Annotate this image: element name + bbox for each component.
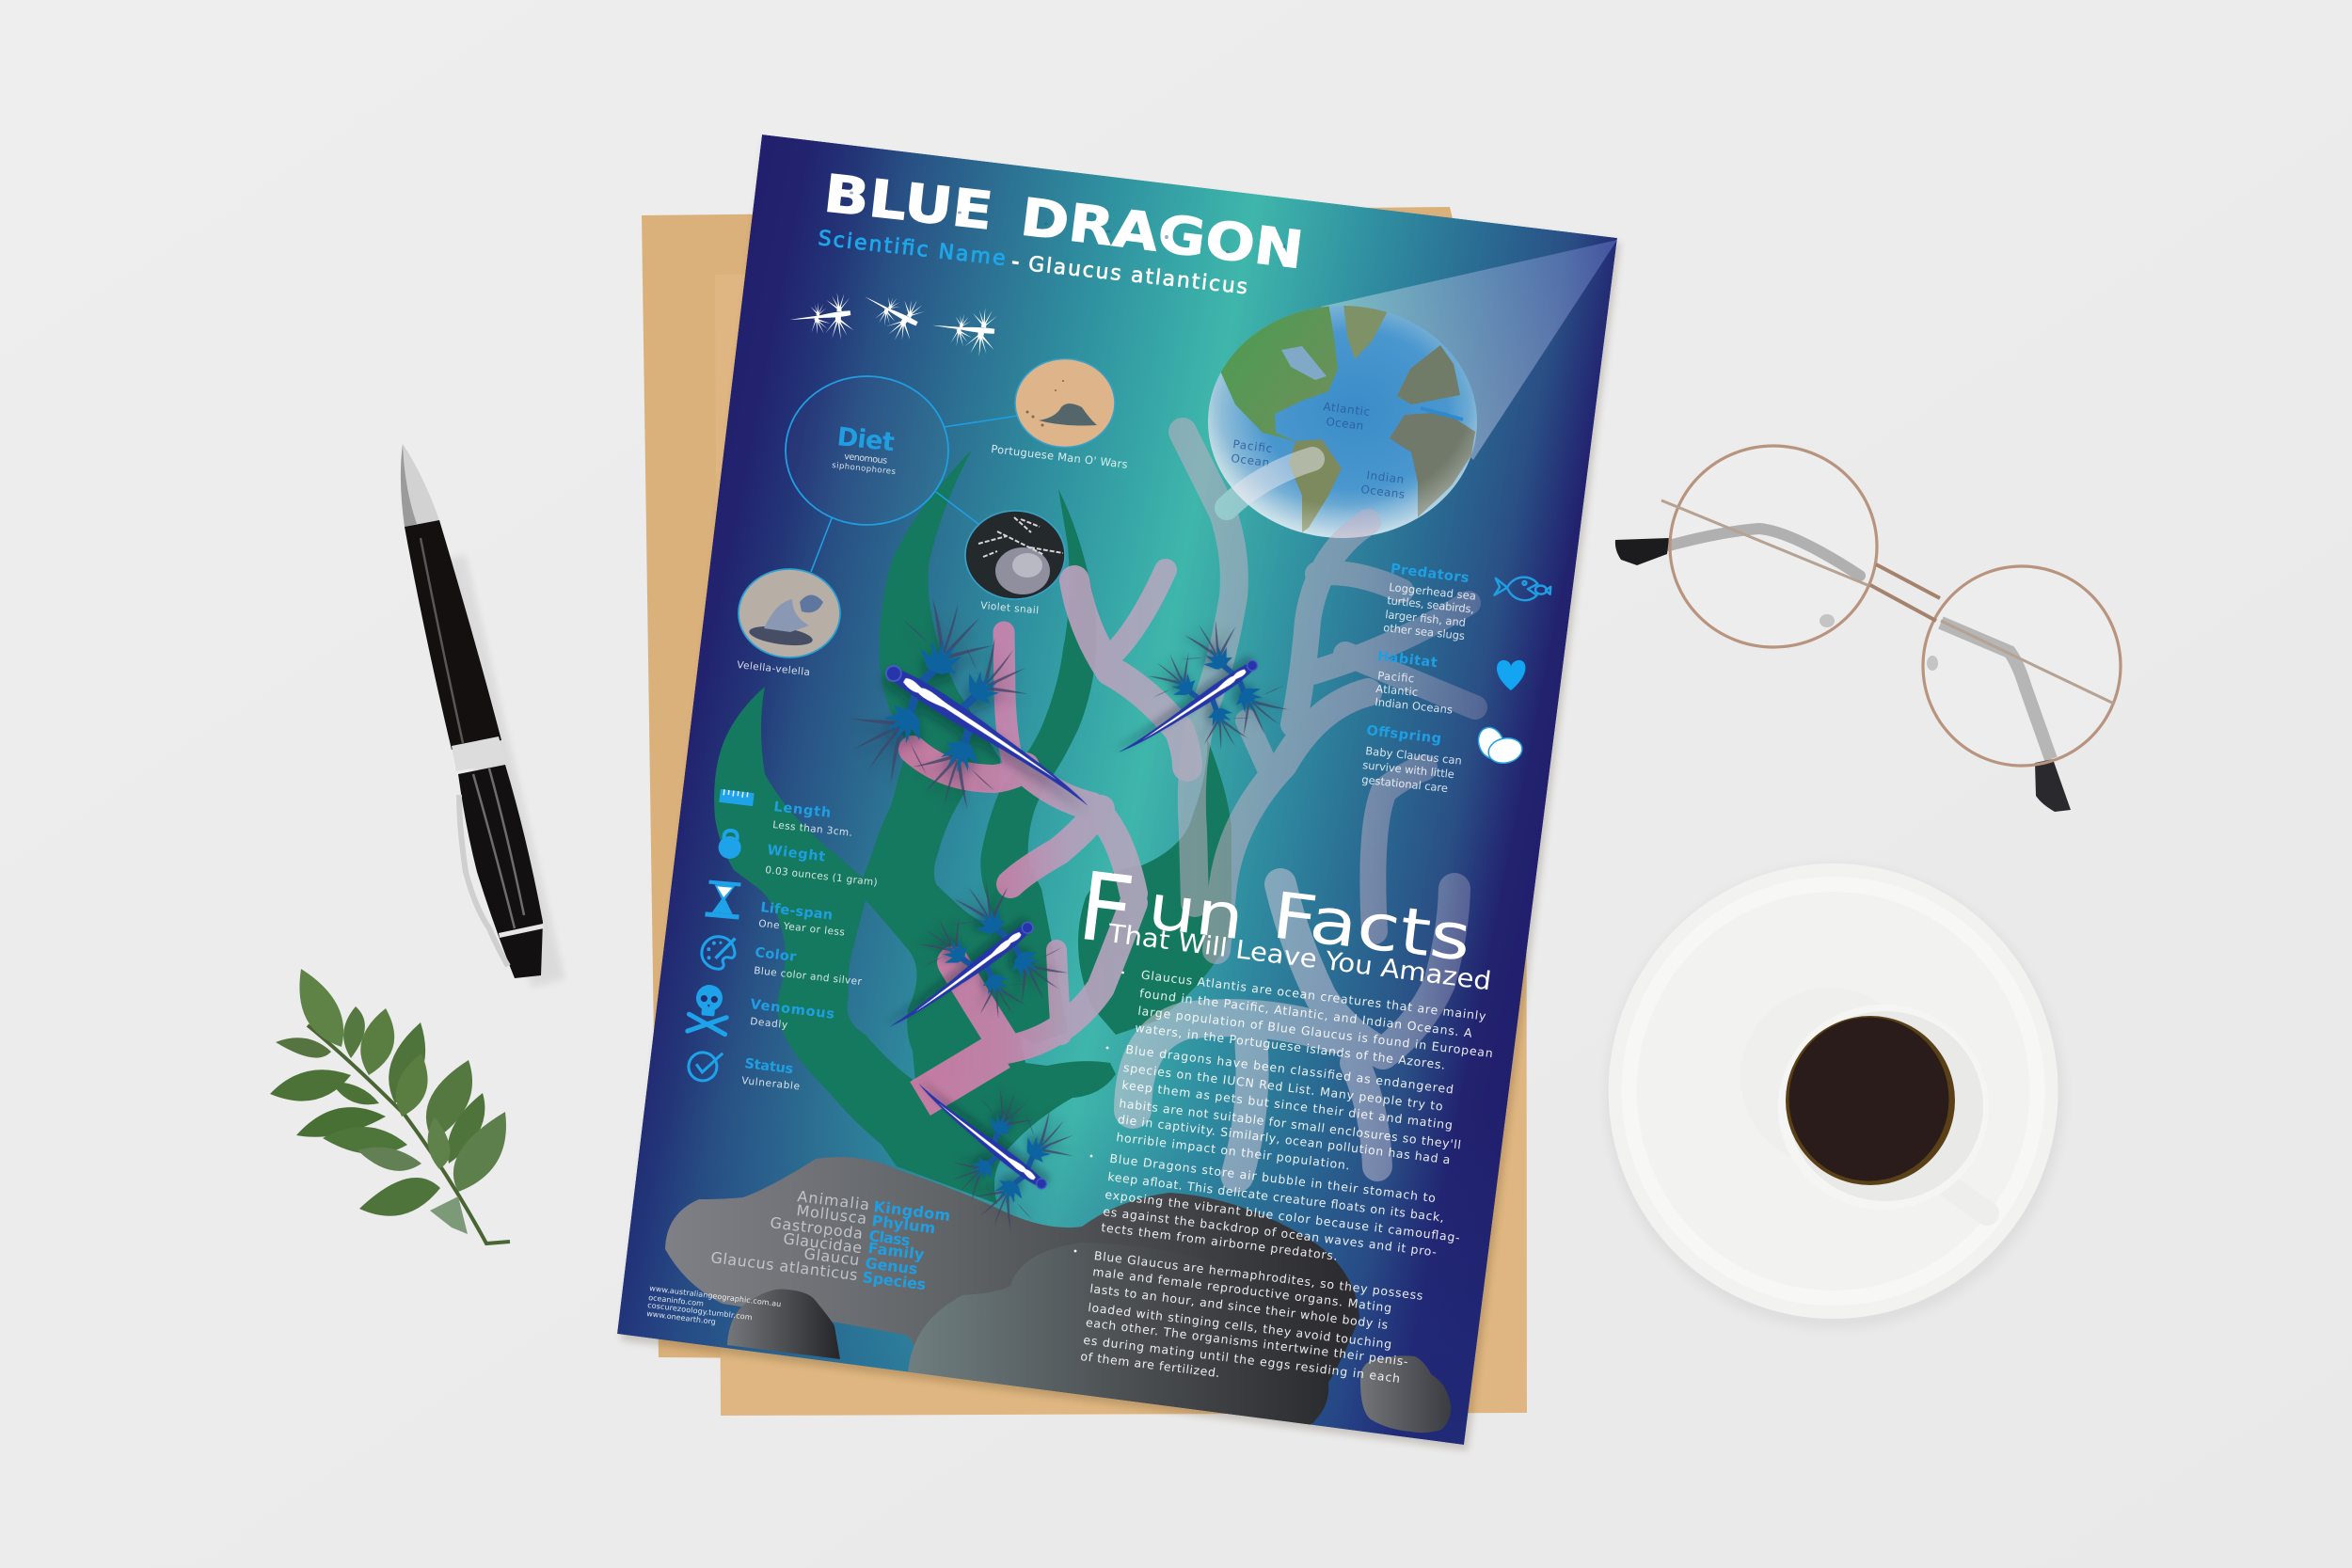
stat: venomous: Deadly (750, 1016, 788, 1031)
taxonomy: Kingdom (873, 1197, 951, 1225)
stat: color: Color (755, 945, 798, 965)
scientific name: Scientific Name (817, 227, 1007, 271)
fun fact 2 (1106, 1042, 1462, 1172)
fun fact 1: waters, in the Portuguese islands of the Azores. (1135, 1021, 1446, 1072)
diet circle (786, 376, 948, 525)
prey: Portuguese Man O' War: Portuguese Man O' Wars (991, 442, 1128, 471)
prey: Velella-velella (737, 569, 840, 678)
icon: hourglass (705, 880, 742, 919)
ocean labels: Ocean (1231, 451, 1270, 469)
fun fact 4: Blue Glaucus are hermaphrodites, so they possess (1093, 1248, 1423, 1303)
diet connector lines (811, 416, 1018, 572)
panel: predators: other sea slugs (1383, 621, 1466, 642)
big dragon 3 (890, 882, 1069, 1027)
panel: offspring: Baby Claucus can (1365, 744, 1463, 768)
poster shadow (621, 141, 1620, 1450)
fun fact 2: die in captivity. Similarly, ocean pollution has had a (1117, 1112, 1451, 1166)
fun fact 3: es against the backdrop of ocean waves and it pro- (1103, 1204, 1438, 1259)
ocean labels: Ocean (1326, 415, 1364, 433)
taxonomy: Species (862, 1268, 927, 1293)
icon: heart (1497, 660, 1526, 690)
sources: oceaninfo.com (648, 1293, 705, 1308)
fun fact 4: each other. The organisms intertwine their penis- (1085, 1315, 1408, 1369)
taxonomy: Class (868, 1227, 912, 1249)
ocean labels (1231, 400, 1406, 501)
sources: www.oneearth.org (646, 1309, 716, 1326)
fun fact 2: habits are not suitable for small enclosures so they'll (1119, 1096, 1462, 1152)
title (821, 163, 1307, 280)
fun fact 4: of them are fertilized. (1080, 1349, 1220, 1380)
taxonomy (710, 1187, 951, 1293)
stat: color (700, 935, 863, 988)
icon: white dragon silhouettes (787, 277, 998, 359)
icon: palette (700, 935, 736, 971)
big dragon 4 (918, 1083, 1073, 1230)
stat: venomous: Venomous (750, 997, 835, 1022)
fun facts heading: Facts (1268, 879, 1475, 976)
icon: kettlebell (718, 830, 742, 860)
prey: Velella-velella: Velella-velella (737, 659, 811, 678)
stat: weight (718, 830, 878, 889)
diet circle: Diet (835, 422, 896, 457)
stat: status: Status (744, 1056, 794, 1077)
stat: length: Length (773, 800, 832, 821)
sources: coscurezoology.tumblr.com (647, 1301, 753, 1322)
big dragon 2 (1119, 621, 1289, 752)
seaweed (714, 450, 1232, 1204)
taxonomy: Phylum (871, 1212, 936, 1237)
panel: predators: Loggerhead sea (1389, 580, 1477, 603)
poster gradient background (617, 135, 1617, 1445)
stat: life-span: Life-span (760, 900, 834, 924)
kraft paper stack (642, 207, 1527, 1416)
stat: life-span: One Year or less (758, 918, 845, 939)
icon: eggs (1474, 724, 1524, 766)
taxonomy: Glaucus atlanticus (710, 1248, 859, 1284)
fun fact 1: large population of Blue Glaucus is found in European (1137, 1004, 1494, 1060)
panel: habitat: Habitat (1376, 649, 1438, 671)
ocean labels: Pacific (1232, 437, 1273, 455)
stat: venomous (688, 983, 835, 1035)
prey: Violet snail: Violet snail (980, 600, 1040, 616)
taxonomy: Gastropoda (770, 1213, 864, 1243)
rocks (665, 1157, 1451, 1453)
panel: habitat: Pacific (1377, 669, 1415, 685)
icon: skull and crossbones (688, 983, 729, 1035)
fun fact 1: Glaucus Atlantis are ocean creatures that are mainly (1140, 967, 1487, 1023)
ocean labels: Atlantic (1323, 400, 1371, 419)
fun fact 4: loaded with stinging cells, they avoid touching (1088, 1300, 1392, 1352)
stat: length: Less than 3cm. (772, 819, 852, 839)
sources (646, 1284, 782, 1326)
fun fact 2: horrible impact on their population. (1116, 1130, 1351, 1172)
fun fact 2: keep them as pets but since their diet and mating (1121, 1078, 1454, 1132)
pale grey coral (1133, 432, 1475, 1176)
panel: offspring: survive with little (1362, 758, 1455, 781)
stat: weight: 0.03 ounces (1 gram) (765, 864, 878, 889)
panel: habitat: Indian Oceans (1375, 695, 1454, 717)
fun fact 4 (1074, 1248, 1423, 1386)
fun fact 4: lasts to an hour, and since their whole body is (1089, 1281, 1389, 1332)
panel: predators: Predators (1390, 562, 1470, 586)
stat: length (719, 789, 852, 839)
poster (617, 135, 1617, 1453)
icon: ruler (719, 789, 755, 806)
light cone (1321, 240, 1617, 460)
stat: life-span (705, 880, 845, 939)
stat: status (688, 1051, 801, 1092)
stat: weight: Wieght (767, 843, 826, 865)
title distress specks (850, 192, 1285, 254)
fun facts heading: F (1073, 851, 1139, 967)
taxonomy: Glaucu (803, 1244, 860, 1269)
stat: status: Vulnerable (741, 1075, 801, 1092)
pen (401, 444, 564, 988)
panel: offspring (1361, 723, 1463, 795)
scientific name: Glaucus atlanticus (1027, 253, 1248, 299)
globe (1208, 303, 1477, 538)
fun fact 3: keep afloat. This delicate creature floats on its back, (1107, 1169, 1445, 1225)
scientific name (817, 227, 1248, 299)
pink coral (913, 570, 1187, 1099)
leaf sprig (270, 969, 510, 1243)
panel: predators: larger fish, and (1385, 608, 1467, 629)
fun fact 1: found in the Pacific, Atlantic, and Indian Oceans. A (1138, 986, 1473, 1040)
panel: habitat: Atlantic (1375, 682, 1419, 699)
panel: predators (1383, 562, 1477, 642)
taxonomy: Animalia (797, 1187, 870, 1213)
taxonomy: Glaucidae (783, 1229, 863, 1257)
panel: predators: turtles, seabirds, (1387, 594, 1475, 616)
panel: offspring: gestational care (1361, 773, 1449, 795)
panel: habitat (1375, 649, 1454, 717)
diet circle: siphonophores (832, 461, 897, 477)
title: DRAGON (1017, 186, 1307, 280)
fun facts heading (1073, 851, 1493, 996)
fun fact 2: species on the IUCN Red List. Many people try to (1122, 1060, 1444, 1114)
fun facts heading: That Will Leave You Amazed (1105, 919, 1493, 996)
fun fact 2: Blue dragons have been classified as endangered (1125, 1042, 1454, 1097)
prey: Violet snail (965, 511, 1065, 616)
sources: www.australiangeographic.com.au (649, 1284, 782, 1308)
title: BLUE (821, 163, 996, 242)
fun fact 4: es during mating until the eggs residing in each (1083, 1333, 1401, 1386)
fun fact 1 (1121, 967, 1494, 1072)
fun fact 3: exposing the vibrant blue color because it camouflag- (1104, 1187, 1461, 1244)
ocean labels: Oceans (1360, 483, 1406, 501)
ocean labels: Indian (1366, 468, 1405, 486)
diet circle: venomous (844, 451, 888, 467)
taxonomy: Genus (865, 1254, 918, 1278)
taxonomy: Mollusca (796, 1201, 867, 1227)
taxonomy: Family (867, 1239, 926, 1263)
big dragon 1 (850, 600, 1088, 809)
prey: Portuguese Man O' War (991, 359, 1128, 471)
icon: check circle (688, 1051, 723, 1083)
glasses (1615, 446, 2121, 812)
fun fact 3 (1090, 1151, 1461, 1263)
icon: fish (1494, 575, 1551, 602)
fun fact 3: tects them from airborne predators. (1101, 1220, 1339, 1263)
stat: color: Blue color and silver (754, 965, 863, 988)
fun facts heading: un (1144, 870, 1248, 954)
fun fact 3: Blue Dragons store air bubble in their stomach to (1109, 1151, 1437, 1205)
scientific name: - (1009, 250, 1021, 275)
panel: offspring: Offspring (1366, 723, 1442, 747)
coffee cup and saucer (1606, 863, 2063, 1328)
fun fact 4: male and female reproductive organs. Mating (1092, 1264, 1392, 1315)
